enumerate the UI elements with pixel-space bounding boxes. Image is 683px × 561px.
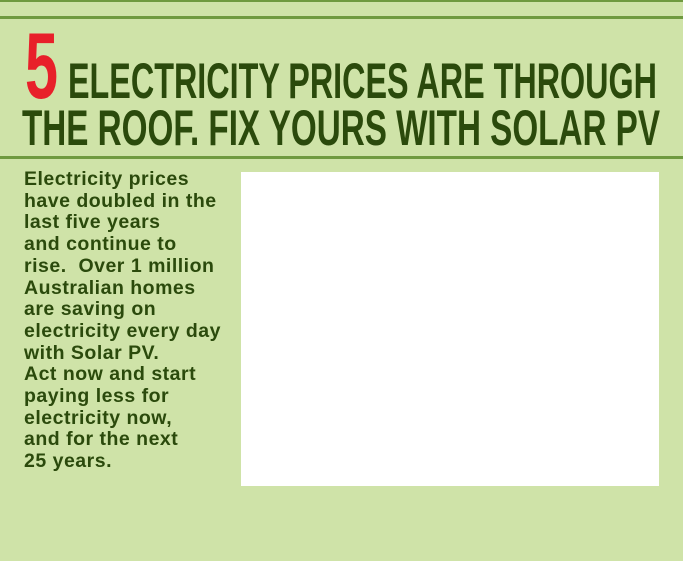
title (22, 20, 660, 156)
white image panel (241, 172, 659, 486)
body text: Electricity prices have doubled in the last five years and continue to rise. Over 1 million Australian homes are saving on electricity every day with Solar PV. Act now and start paying less for electricity now, and for the next 25 years. (24, 168, 221, 472)
